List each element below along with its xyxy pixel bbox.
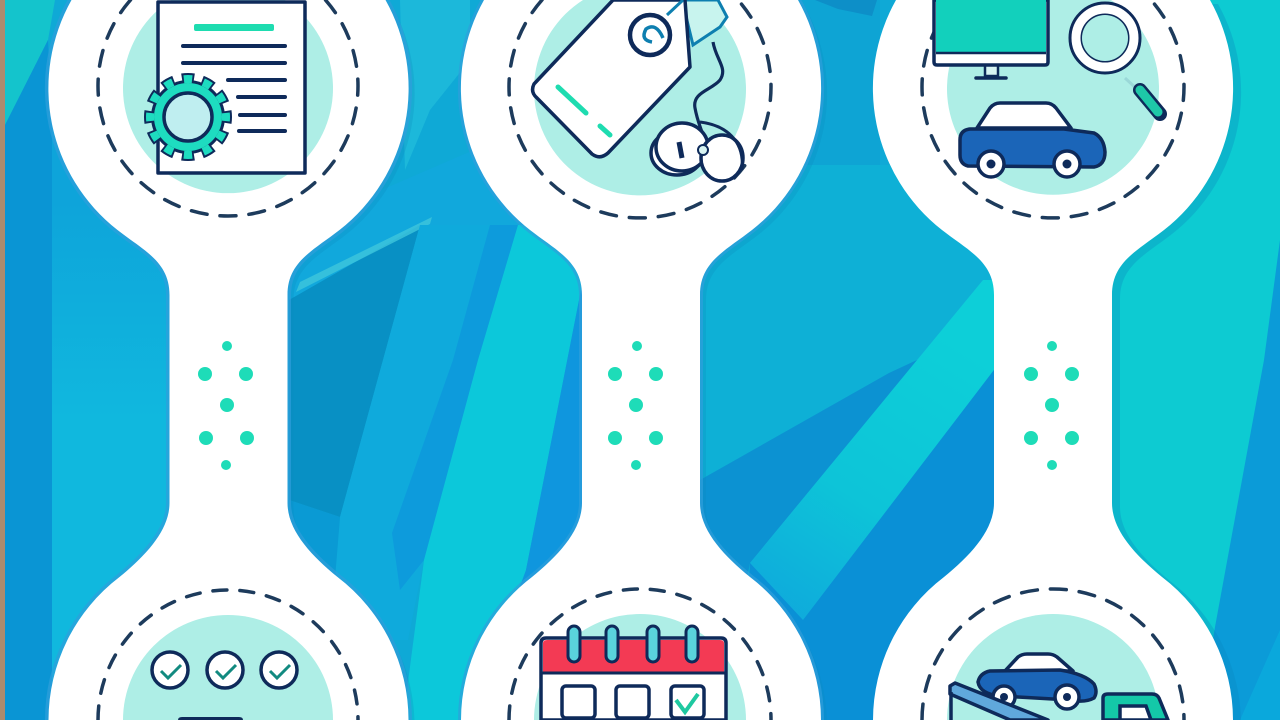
icon: gear (149, 78, 227, 156)
connector column 3 (873, 0, 1241, 720)
icon: three check marks (98, 590, 358, 720)
icon: car on tow truck (922, 589, 1184, 720)
icon: calendar (509, 589, 771, 720)
connector column 2 (461, 0, 827, 720)
icon: magnifier (1076, 9, 1160, 114)
icon: price tag with cord (509, 0, 771, 218)
icon: blue car (960, 103, 1105, 177)
dot pattern column 3 (1024, 341, 1079, 470)
connector column 1 (48, 0, 415, 720)
dot pattern column 1 (198, 341, 254, 470)
icon: monitor, magnifier and car (922, 0, 1184, 218)
icon: document with gear (98, 0, 358, 216)
dot pattern column 2 (608, 341, 663, 470)
